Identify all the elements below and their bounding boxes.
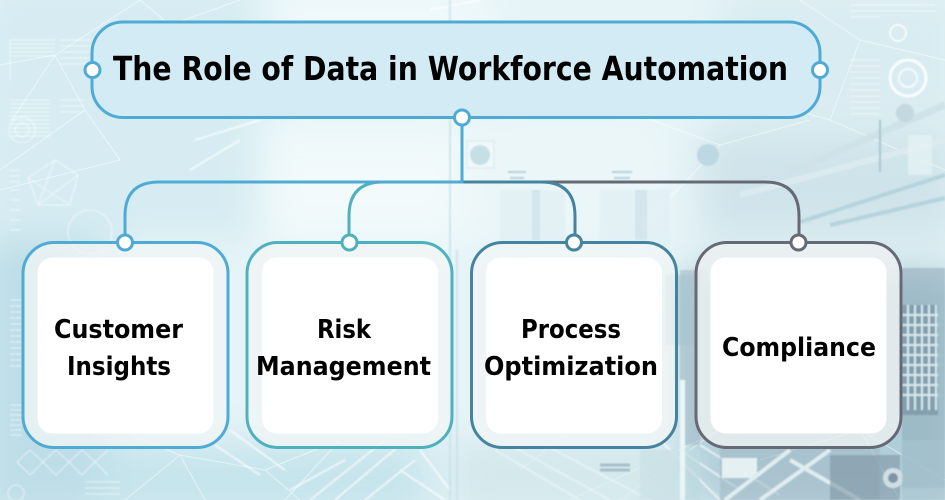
label: Process xyxy=(521,315,621,345)
label: Compliance xyxy=(722,333,876,363)
title panel xyxy=(85,22,828,125)
background: left data panel texture xyxy=(8,40,120,500)
node xyxy=(342,235,357,250)
label: Insights xyxy=(67,352,171,382)
connector: to Process Optimization xyxy=(462,182,575,242)
title: The Role of Data in Workforce Automation xyxy=(113,49,788,88)
connectors: tree linking title to four cards xyxy=(125,117,799,242)
panel: Process Optimization xyxy=(472,235,676,448)
background: white light streaks xyxy=(190,0,780,500)
node xyxy=(566,235,582,250)
background: factory machinery tanks and pipes xyxy=(450,0,945,500)
panel: Risk Management xyxy=(247,235,452,448)
label: Customer xyxy=(54,315,183,345)
title node right xyxy=(812,62,828,78)
label xyxy=(484,315,658,382)
connector: to Risk Management xyxy=(349,182,462,242)
node xyxy=(791,235,806,250)
connector: to Customer Insights xyxy=(125,117,462,242)
title node bottom xyxy=(454,110,470,125)
title node left xyxy=(85,62,100,78)
connector: to Compliance xyxy=(462,182,799,242)
node xyxy=(118,235,132,250)
label: Management xyxy=(256,352,431,382)
panel: Customer Insights xyxy=(23,235,228,448)
label xyxy=(54,315,183,382)
label xyxy=(256,315,431,382)
label: Optimization xyxy=(484,352,658,382)
label: Risk xyxy=(317,315,372,345)
panel: Compliance xyxy=(696,235,901,448)
